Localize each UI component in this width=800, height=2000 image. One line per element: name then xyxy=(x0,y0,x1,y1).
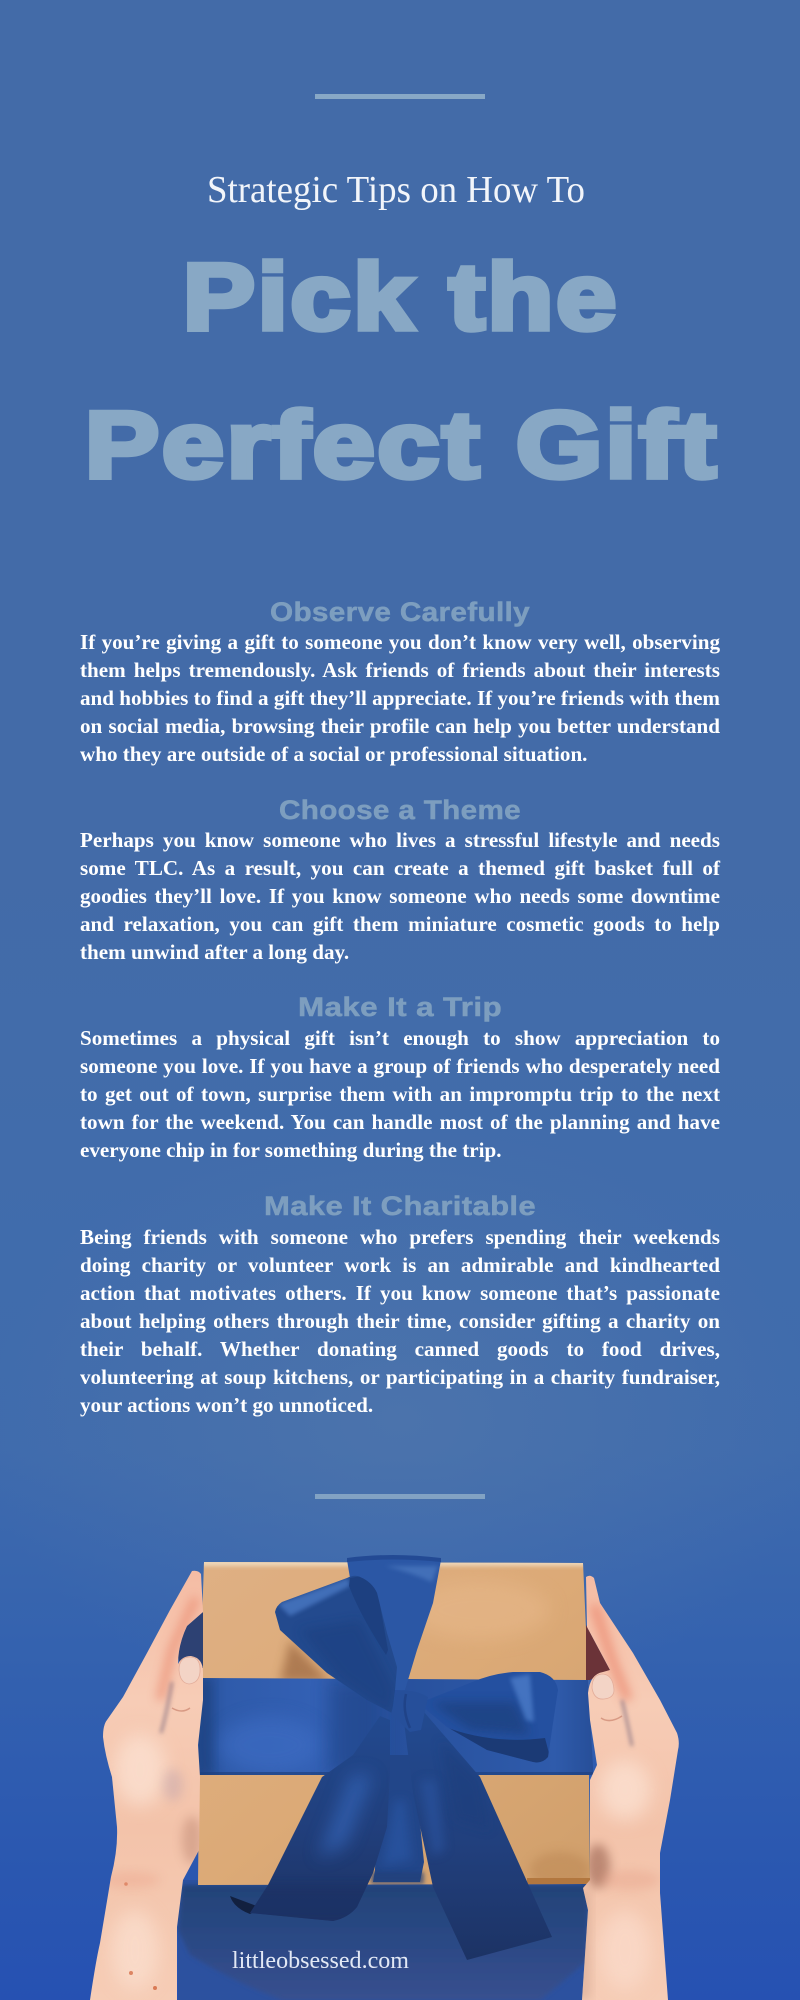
text block: Make It Charitable: your actions won’t go unnoticed. xyxy=(80,1393,373,1417)
tail notch xyxy=(230,1896,262,1914)
text block: Choose a Theme: some TLC. As a result, you can create a themed gift basket full of xyxy=(80,856,720,880)
text block: Observe Carefully: who they are outside of a social or professional situation. xyxy=(80,742,587,766)
text block: Make It Charitable: about helping others through their time, consider gifting a charity on xyxy=(80,1309,720,1333)
main title xyxy=(85,244,719,497)
gaps between fingers and thumbs xyxy=(176,1612,610,1680)
heading: Make It a Trip: Make It a Trip xyxy=(298,992,502,1022)
text block: Choose a Theme xyxy=(80,828,720,964)
left hand xyxy=(90,1571,203,2000)
text block: Make It Charitable: volunteering at soup kitchens, or participating in a charity fundraiser, xyxy=(80,1365,720,1389)
text block: Make It a Trip: to get out of town, surprise them with an impromptu trip to the next xyxy=(80,1082,720,1106)
text block: Make It a Trip xyxy=(80,1026,720,1162)
text block: Make It a Trip: someone you love. If you have a group of friends who desperately need xyxy=(80,1054,720,1078)
heading: Choose a Theme: Choose a Theme xyxy=(279,795,521,825)
text block: Make It Charitable: Being friends with someone who prefers spending their weekends xyxy=(80,1225,720,1249)
text block: Make It a Trip: everyone chip in for something during the trip. xyxy=(80,1138,501,1162)
illustration: hands holding wrapped gift xyxy=(90,1555,679,2000)
vertical ribbon top xyxy=(347,1555,441,1690)
text block: Make It a Trip: Sometimes a physical gift isn’t enough to show appreciation to xyxy=(80,1026,720,1050)
paper shading xyxy=(200,1558,592,1888)
text block: Make It Charitable: doing charity or volunteer work is an admirable and kindhearted xyxy=(80,1253,720,1277)
right hand xyxy=(578,1576,679,2000)
ribbon centre drop xyxy=(371,1755,424,1884)
soft dark blue shadow below the gift xyxy=(178,1885,588,2000)
text block: Observe Carefully: If you’re giving a gift to someone you don’t know very well, observing xyxy=(80,630,720,654)
decorative top bar xyxy=(315,94,485,99)
blue area behind the arms xyxy=(178,1880,592,2000)
text block: Choose a Theme: goodies they’ll love. If you know someone who needs some downtime xyxy=(80,884,720,908)
text block: Observe Carefully xyxy=(80,630,720,766)
right thumbnail xyxy=(592,1674,614,1699)
left tail of bow xyxy=(230,1716,390,1921)
text block: Choose a Theme: and relaxation, you can gift them miniature cosmetic goods to help xyxy=(80,912,720,936)
website url: littleobsessed.com xyxy=(232,1948,409,1974)
left hand shading xyxy=(100,1598,202,1990)
right hand shading xyxy=(578,1605,660,2000)
right tail of bow xyxy=(404,1713,552,1960)
horizontal ribbon xyxy=(195,1676,595,1778)
decorative lower bar xyxy=(315,1494,485,1499)
main title: Perfect Gift xyxy=(85,392,719,497)
main title: Pick the xyxy=(183,244,619,349)
gift box xyxy=(198,1558,592,1888)
text block: Make It Charitable: their behalf. Whether donating canned goods to food drives, xyxy=(80,1337,720,1361)
text block: Make It a Trip: town for the weekend. You can handle most of the planning and have xyxy=(80,1110,720,1134)
title block xyxy=(85,169,719,497)
left thumbnail xyxy=(179,1657,200,1684)
bow knot xyxy=(391,1691,428,1732)
heading: Observe Carefully: Observe Carefully xyxy=(270,597,530,627)
text block: Choose a Theme: Perhaps you know someone who lives a stressful lifestyle and needs xyxy=(80,828,720,852)
right bow loop xyxy=(431,1672,558,1762)
text block: Choose a Theme: them unwind after a long day. xyxy=(80,940,349,964)
text block: Make It Charitable: action that motivates others. If you know someone that’s passionate xyxy=(80,1281,720,1305)
subtitle: Strategic Tips on How To xyxy=(207,169,585,211)
section headings xyxy=(264,597,536,1221)
text block: Observe Carefully: on social media, browsing their profile can help you better understand xyxy=(80,714,720,738)
text block: Observe Carefully: them helps tremendously. Ask friends of friends about their interests xyxy=(80,658,720,682)
heading: Make It Charitable: Make It Charitable xyxy=(264,1191,536,1221)
text block: Make It Charitable xyxy=(80,1225,720,1417)
text block: Observe Carefully: and hobbies to find a gift they’ll appreciate. If you’re friends with them xyxy=(80,686,720,710)
left bow loop xyxy=(275,1576,397,1712)
